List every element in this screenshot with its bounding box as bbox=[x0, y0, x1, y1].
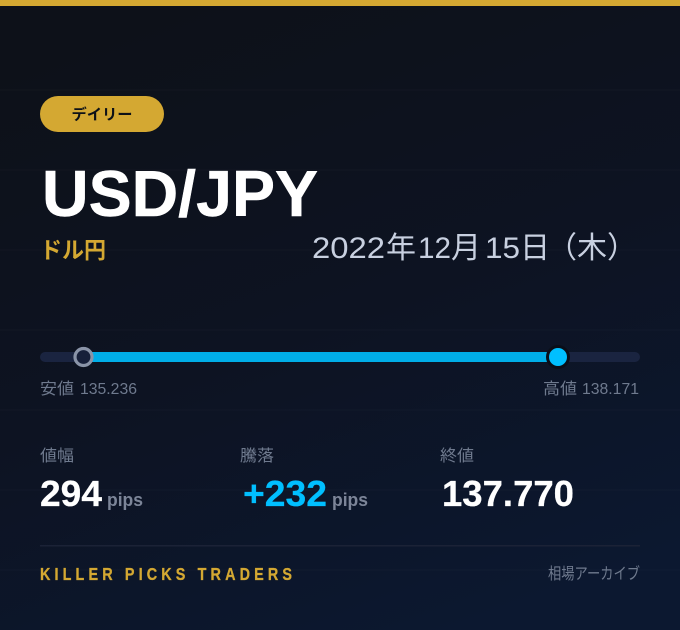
low price label: 135.236 bbox=[80, 381, 137, 398]
date bbox=[312, 232, 637, 265]
date: 12 bbox=[418, 232, 451, 265]
title: USD/JPY: USD/JPY bbox=[42, 157, 318, 230]
date: （木） bbox=[547, 232, 637, 265]
stat: change: 騰落 bbox=[240, 447, 274, 465]
high price label: 138.171 bbox=[582, 381, 639, 398]
stat: range: 値幅 bbox=[40, 447, 74, 465]
badge: daily: デイリー bbox=[72, 106, 132, 124]
marker: high bbox=[548, 346, 568, 368]
footer brand: KILLER PICKS TRADERS bbox=[40, 565, 292, 584]
marker: low bbox=[75, 348, 92, 366]
stat: change bbox=[240, 447, 368, 514]
top accent bar bbox=[0, 0, 680, 6]
stat: change: pips bbox=[332, 490, 368, 510]
date: 年 bbox=[386, 232, 416, 265]
high price label: 高値 bbox=[543, 380, 577, 398]
high price label bbox=[543, 380, 639, 398]
stat: range bbox=[40, 447, 143, 514]
subtitle: ドル円: ドル円 bbox=[40, 237, 106, 263]
date: 月 bbox=[451, 232, 481, 265]
stat: close: 137.770 bbox=[442, 473, 574, 514]
range bar bbox=[40, 346, 640, 368]
stat: close bbox=[440, 447, 574, 514]
date: 日 bbox=[520, 232, 550, 265]
badge: daily bbox=[40, 96, 164, 132]
stat: range: pips bbox=[107, 490, 143, 510]
date: 2022 bbox=[312, 232, 385, 265]
stat: range: 294 bbox=[40, 473, 102, 514]
low price label: 安値 bbox=[40, 380, 74, 398]
low price label bbox=[40, 380, 137, 398]
footer archive link: 相場アーカイブ bbox=[548, 564, 640, 583]
stat: change: +232 bbox=[243, 473, 327, 514]
stat: close: 終値 bbox=[440, 447, 474, 465]
date: 15 bbox=[485, 232, 520, 265]
